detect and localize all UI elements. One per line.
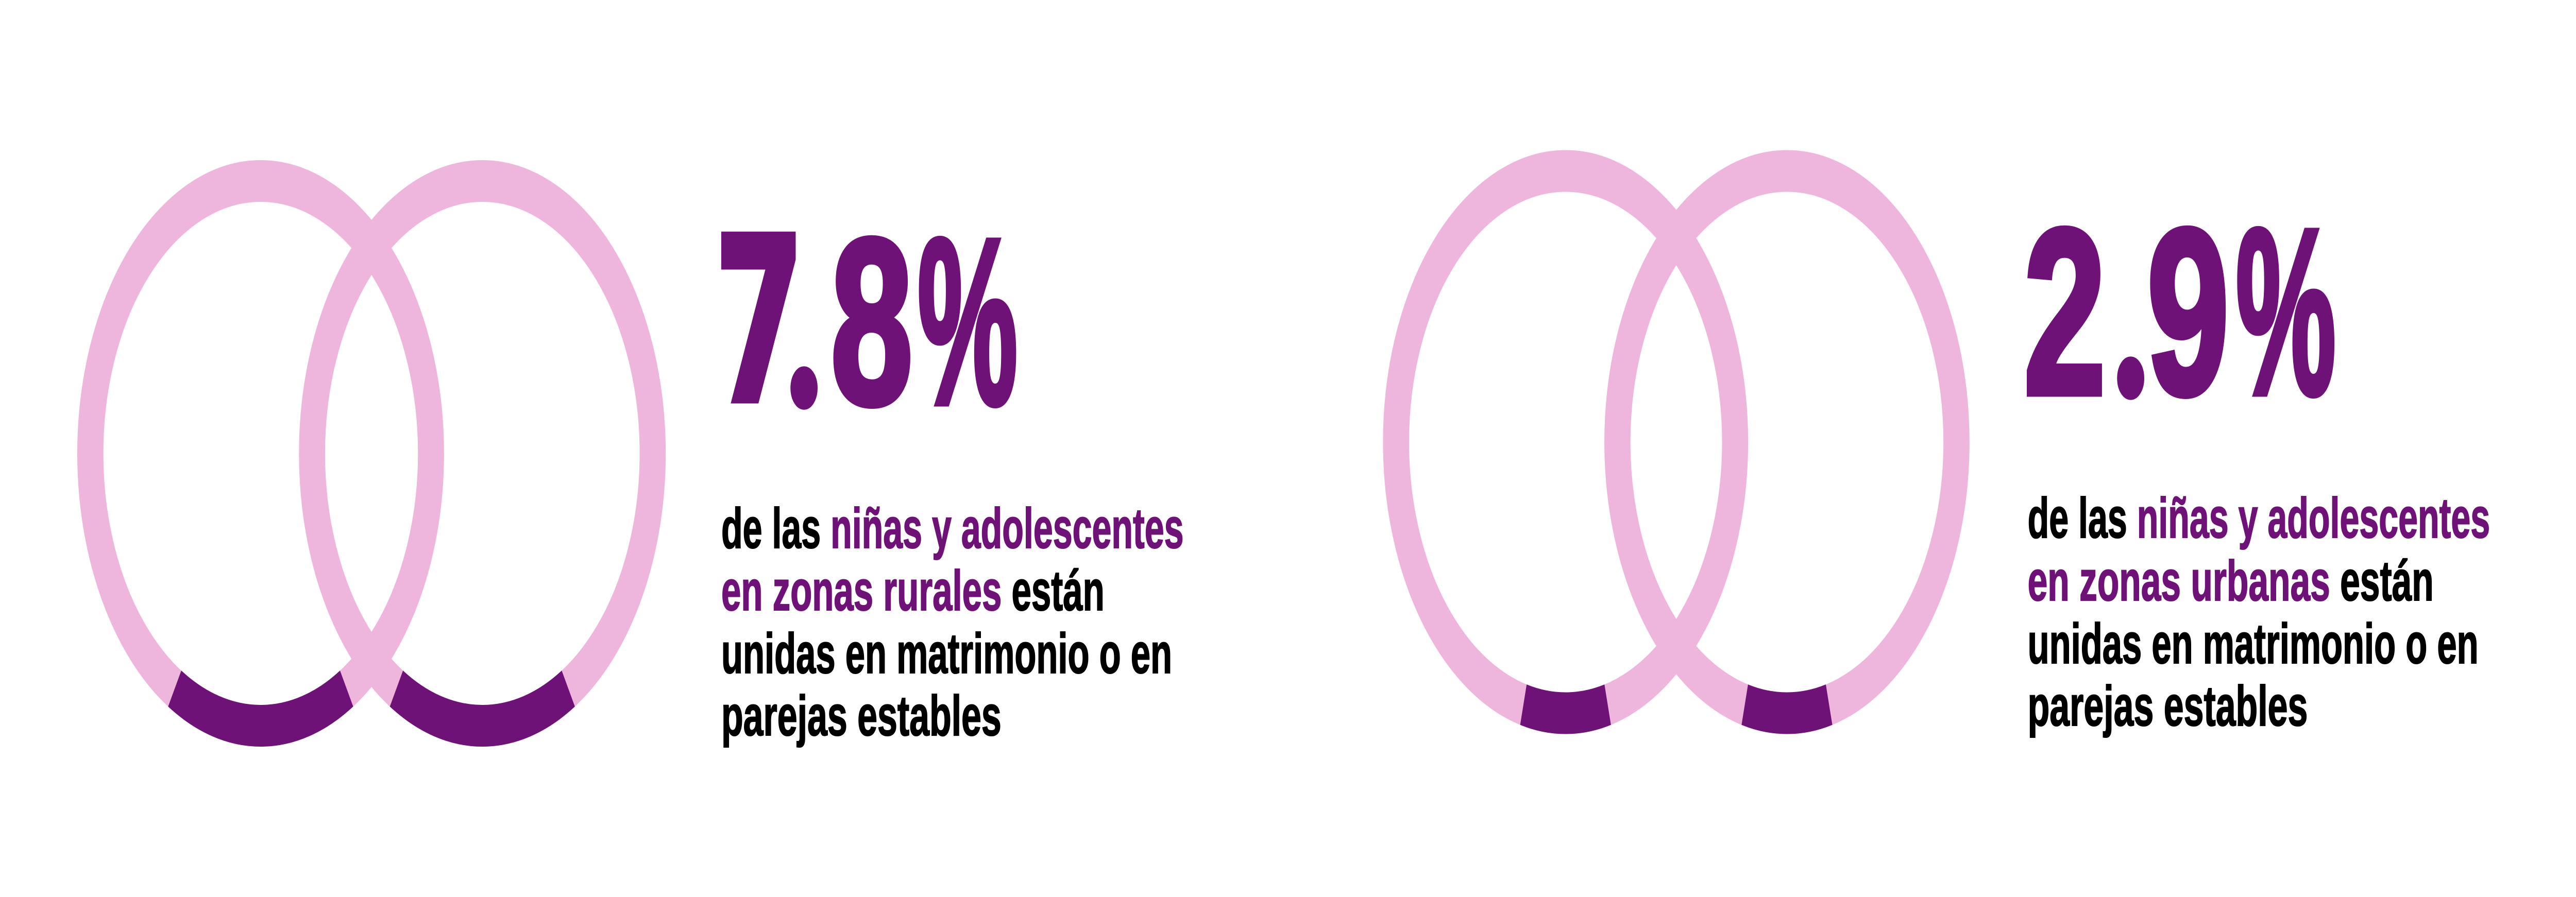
panel: urban bbox=[1396, 171, 2490, 738]
panel: rural bbox=[90, 181, 1184, 748]
big number: 7.8%: 7 bbox=[715, 189, 804, 454]
big number: 7.8%: . bbox=[786, 202, 822, 453]
text block: rural description bbox=[721, 497, 1184, 748]
text block: rural description: parejas estables bbox=[721, 685, 1002, 748]
icon: interlocked rings rural bbox=[90, 181, 653, 726]
text block: rural description: en zonas rurales están bbox=[721, 560, 1105, 623]
text block: urban description: unidas en matrimonio o en bbox=[2028, 613, 2479, 676]
big number: 7.8%: % bbox=[918, 189, 1018, 453]
big number: 2.9%: . bbox=[2113, 192, 2148, 443]
big number: 2.9%: % bbox=[2236, 180, 2336, 443]
text block: urban description: parejas estables bbox=[2028, 675, 2308, 738]
text block: urban description bbox=[2028, 487, 2490, 738]
text block: urban description: en zonas urbanas están bbox=[2028, 550, 2434, 613]
big number: 7.8%: 8 bbox=[831, 189, 913, 453]
text block: rural description: de las niñas y adolescentes bbox=[721, 497, 1184, 560]
big number: 2.9% bbox=[2024, 180, 2336, 443]
text block: rural description: unidas en matrimonio o en bbox=[721, 623, 1172, 685]
icon: interlocked rings urban bbox=[1396, 171, 1957, 713]
text block: urban description: de las niñas y adolescentes bbox=[2028, 487, 2490, 550]
big number: 2.9%: 9 bbox=[2147, 180, 2229, 443]
big number: 2.9%: 2 bbox=[2024, 180, 2106, 443]
big number: 7.8% bbox=[715, 189, 1018, 454]
